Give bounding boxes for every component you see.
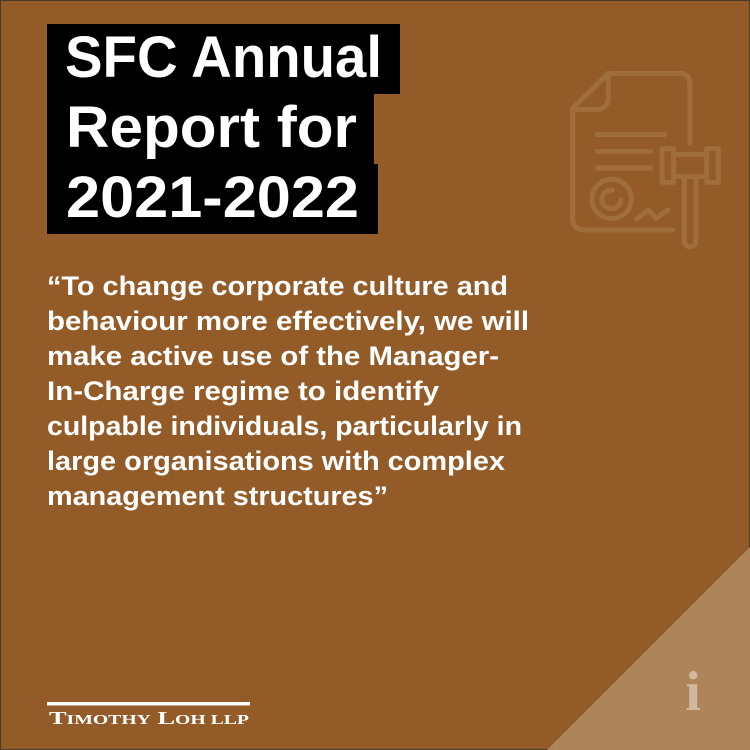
info corner triangle (547, 547, 750, 750)
quote text: large organisations with complex (47, 446, 505, 476)
footer logo (47, 702, 250, 728)
logo rule (47, 702, 250, 706)
title text: SFC Annual (65, 25, 382, 90)
quote text: make active use of the Manager- (47, 341, 499, 371)
title block (47, 24, 400, 234)
quote text: management structures” (47, 481, 388, 511)
quote text (47, 271, 529, 511)
quote text: “To change corporate culture and (47, 271, 508, 301)
title text: 2021-2022 (66, 165, 359, 230)
title text (65, 25, 382, 230)
icon: info letter i: i (685, 661, 701, 723)
quote text: behaviour more effectively, we will (47, 306, 529, 336)
title background (47, 24, 400, 234)
title text: Report for (66, 95, 357, 160)
quote text: In-Charge regime to identify (47, 376, 439, 406)
icon: document with gavel watermark (573, 73, 718, 247)
quote text: culpable individuals, particularly in (47, 411, 522, 441)
logo wordmark: T IMOTHY L OH LLP (49, 708, 249, 728)
